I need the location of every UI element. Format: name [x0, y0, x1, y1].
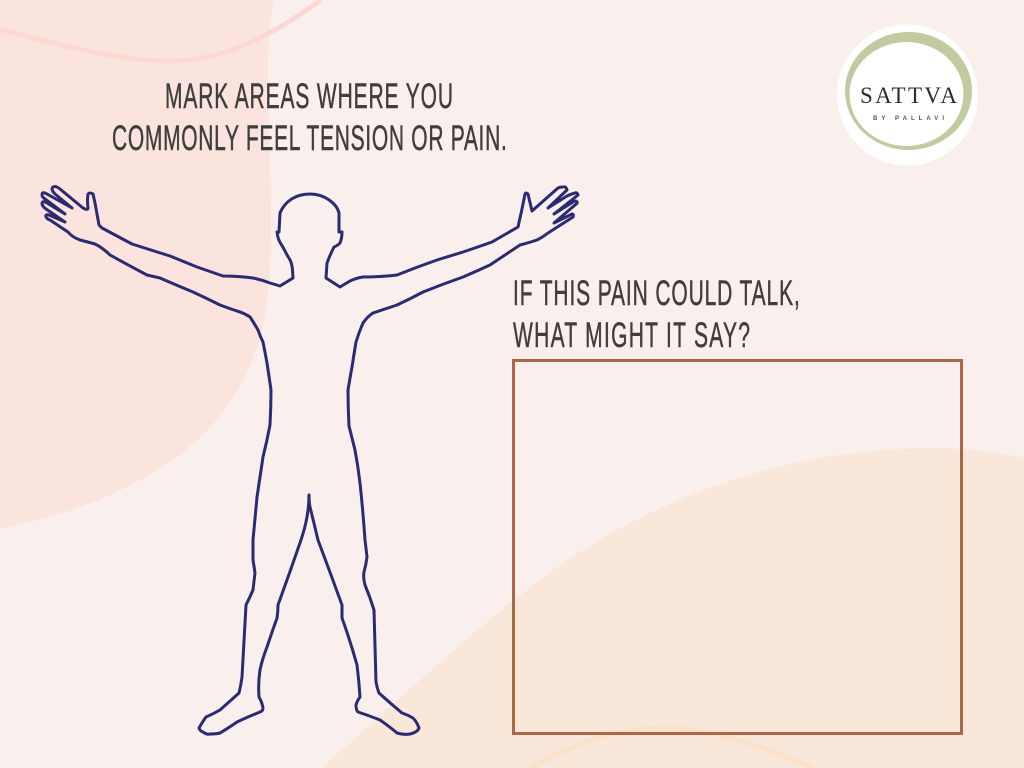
heading: mark areas: MARK AREAS WHERE YOU [165, 78, 453, 116]
heading: if this pain could talk: WHAT MIGHT IT SAY? [513, 317, 750, 355]
heading: mark areas: COMMONLY FEEL TENSION OR PAIN. [112, 120, 507, 158]
heading: mark areas [112, 78, 507, 158]
logo: SATTVA [860, 83, 957, 108]
answer box [514, 360, 962, 734]
heading: if this pain could talk: IF THIS PAIN COULD TALK, [513, 275, 800, 313]
logo [837, 24, 978, 166]
heading: if this pain could talk [513, 275, 800, 355]
body outline figure [42, 187, 578, 734]
logo: BY PALLAVI [873, 116, 944, 122]
